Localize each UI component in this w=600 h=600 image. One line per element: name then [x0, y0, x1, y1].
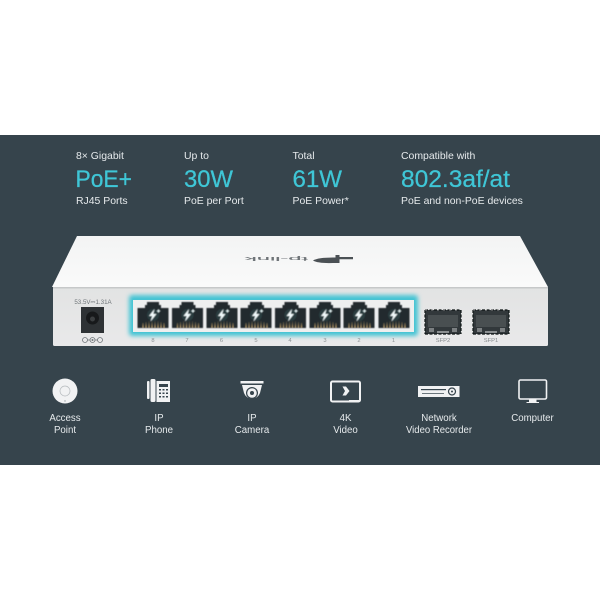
port numbers: 1 [392, 338, 395, 344]
switch front face [53, 287, 548, 346]
device: 4K video [331, 382, 360, 436]
port numbers: 6 [220, 338, 223, 344]
device: network video recorder: Video Recorder [406, 425, 473, 436]
switch top face [52, 236, 548, 287]
SFP slots [425, 310, 509, 344]
RJ45 ports 8 to 1 [138, 302, 410, 328]
device: network video recorder: Network [421, 413, 457, 424]
device: 4K video: 4K [340, 413, 352, 424]
spec: 802.3af/at compatibility: 802.3af/at [401, 166, 510, 193]
spec: 802.3af/at compatibility: PoE and non-PoE devices [401, 196, 523, 207]
device: IP phone: Phone [145, 425, 173, 436]
device: computer [511, 380, 555, 424]
PoE port highlight [129, 295, 418, 336]
device: access point: Access [49, 413, 81, 424]
spec: 802.3af/at compatibility [401, 151, 523, 207]
port numbers: 7 [185, 338, 189, 344]
spec: 61W total: Total [292, 151, 315, 162]
spec: 802.3af/at compatibility: Compatible with [401, 151, 475, 162]
port numbers: 5 [254, 338, 258, 344]
SFP slots: SFP2 [436, 338, 450, 344]
device: IP camera: IP [247, 413, 257, 424]
SFP slots: SFP1 [484, 338, 498, 344]
power socket: 53.5V⎓1.31A [74, 299, 113, 306]
network switch [52, 236, 548, 346]
device: IP camera: Camera [235, 425, 270, 436]
spec: 61W total [292, 151, 349, 207]
spec: 61W total: PoE Power* [292, 196, 349, 207]
device: access point: Point [54, 425, 76, 436]
icon: access point [52, 378, 78, 404]
spec: PoE+ ports: RJ45 Ports [76, 196, 128, 207]
device: network video recorder [406, 386, 473, 436]
background band [0, 135, 600, 465]
device: computer: Computer [511, 413, 555, 424]
device: 4K video: Video [333, 425, 358, 436]
spec: 30W per port: Up to [184, 151, 209, 162]
port numbers: 2 [357, 338, 361, 344]
icon: IP camera [240, 381, 264, 399]
port numbers: 3 [323, 338, 327, 344]
tp-link logo (upside down): tp-link [244, 255, 308, 262]
spec: 30W per port [184, 151, 244, 207]
port numbers: 4 [288, 338, 292, 344]
icon: recorder [418, 386, 460, 397]
icon: IP phone [147, 379, 170, 402]
spec: 30W per port: 30W [184, 166, 233, 193]
spec: PoE+ ports [76, 151, 132, 207]
spec: PoE+ ports: 8× Gigabit [76, 151, 124, 162]
spec: PoE+ ports: PoE+ [76, 166, 132, 193]
spec: 30W per port: PoE per Port [184, 196, 244, 207]
power socket [74, 299, 113, 342]
device: access point [49, 378, 81, 436]
spec: 61W total: 61W [292, 166, 342, 193]
port numbers: 8 [151, 338, 155, 344]
device: IP camera [235, 381, 270, 436]
icon: 4K video screen [331, 382, 360, 402]
device: IP phone: IP [154, 413, 164, 424]
device: IP phone [145, 379, 173, 436]
tp-link logo (upside down) [244, 255, 353, 263]
icon: computer monitor [519, 380, 546, 403]
port numbers [151, 338, 395, 344]
